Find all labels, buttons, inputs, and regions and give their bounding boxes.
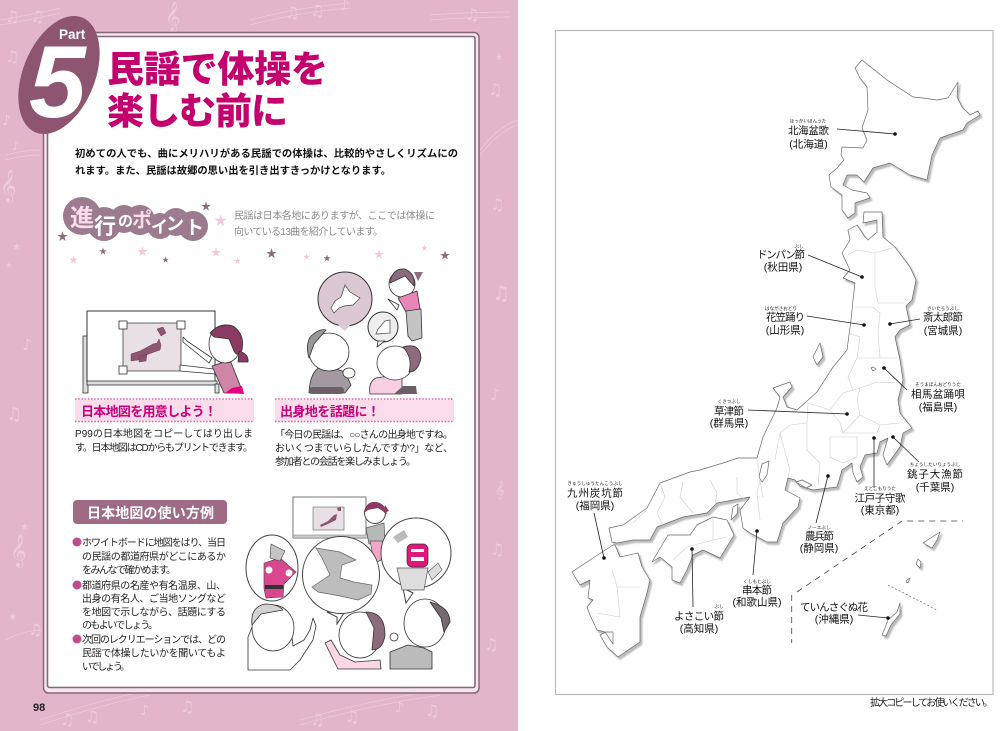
usage list <box>72 536 226 673</box>
stars row: ★ <box>137 246 148 258</box>
pink left page panel: ♫ <box>345 707 359 726</box>
pink left page panel: ♪ <box>395 700 404 716</box>
pink left page panel: ♪ <box>490 385 500 404</box>
prefecture borders <box>597 247 905 617</box>
usage list: 都道府県の名産や有名温泉、山、 <box>82 579 226 592</box>
stars row: ★ <box>162 256 169 264</box>
speech bubble: namahage <box>381 518 451 603</box>
heading: usage examples: 日本地図の使い方例 <box>87 505 214 521</box>
pink left page panel: ★ <box>495 53 503 63</box>
label: Shizuoka: ノーエぶし <box>808 525 831 530</box>
label: Chiba: 銚子大漁節 <box>907 468 963 480</box>
stars row: ★ <box>374 250 384 261</box>
stars row: ★ <box>421 244 428 252</box>
label: Chiba <box>891 435 963 494</box>
label: Fukuoka: きゅうしゅうたんこうぶし <box>567 480 623 487</box>
text: hometown topic <box>275 428 453 468</box>
stars row: ★ <box>214 213 227 228</box>
label: Fukuoka <box>567 480 623 560</box>
point description: 民謡は日本各地にありますが、ここでは体操に <box>234 209 435 222</box>
label: Okinawa <box>800 600 890 626</box>
pink left page panel: ♫ <box>30 7 44 26</box>
audience: three people <box>248 599 450 670</box>
label: Hokkaido: ほっかいぼんうた <box>790 118 827 124</box>
label: Akita: ぶし <box>794 244 804 249</box>
label: Chiba: ちょうしたいりょうぶし <box>910 462 961 468</box>
heading: hometown topic <box>275 399 454 422</box>
heading: prepare map: 日本地図を用意しよう！ <box>81 404 217 419</box>
label: Miyagi <box>888 305 963 337</box>
label: Miyagi: 斎太郎節 <box>923 310 963 324</box>
badge: progress point: ト <box>185 218 204 239</box>
label: Kochi: よさこい節 <box>674 610 724 622</box>
label: Miyagi: さいたろうぶし <box>927 305 959 312</box>
pink left page panel: 𝄞 <box>0 169 17 203</box>
label: Fukushima: そうまぼんおどりうた <box>915 381 961 388</box>
pink left page panel: ♫ <box>490 540 504 559</box>
stars row: ★ <box>201 202 211 213</box>
stars row <box>57 202 450 265</box>
title: 楽しむ前に <box>107 91 288 132</box>
panel: map frame <box>556 30 993 694</box>
usage list: の民謡の都道府県がどこにあるか <box>82 550 226 563</box>
pink left page panel: ♫ <box>60 710 74 729</box>
label: Gunma: (群馬県) <box>710 416 748 430</box>
intro text: れます。また、民謡は故郷の思い出を引き出すきっかけとなります。 <box>75 164 391 177</box>
pink left page panel: ♫ <box>28 620 42 639</box>
part badge: 5 <box>29 25 87 139</box>
pink left page panel: ♫ <box>488 80 502 99</box>
usage list: 民謡で体操したいかを聞いてもよ <box>82 646 226 660</box>
heading: prepare map <box>75 399 254 422</box>
label: Akita: ドンパン節 <box>757 248 805 261</box>
usage list: をみんなで確かめます。 <box>82 564 176 576</box>
title <box>107 49 328 132</box>
label: Kochi: (高知県) <box>680 622 718 635</box>
white framed panel <box>44 32 479 693</box>
badge: progress point: 進 <box>70 205 94 232</box>
pink left page panel: ♪ <box>12 139 20 153</box>
label: Gunma: くさつぶし <box>718 398 741 404</box>
pink left page panel: ♪ <box>140 703 149 719</box>
page number: 98 <box>33 702 45 714</box>
stars row: ★ <box>99 247 107 256</box>
label: Gunma <box>710 398 849 430</box>
label: Yamagata <box>765 305 866 336</box>
stars row: ★ <box>57 231 68 243</box>
stars row: ★ <box>323 254 331 263</box>
label: Fukushima <box>882 366 966 414</box>
usage list: を地図で示しながら、話題にする <box>82 606 226 618</box>
label: Yamagata: (山形県) <box>766 324 804 336</box>
label: Fukushima: 相馬盆踊唄 <box>911 388 966 400</box>
label: Wakayama: くしもとぶし <box>743 579 771 584</box>
part badge <box>2 4 116 146</box>
point description <box>234 209 435 238</box>
label: Akita: (秋田県) <box>764 260 802 274</box>
title: 民謡で体操を <box>107 49 328 90</box>
label: Fukushima: (福島県) <box>919 400 957 414</box>
stars row: ★ <box>440 251 450 262</box>
label: Hokkaido: (北海道) <box>789 138 828 150</box>
label: Shizuoka <box>800 474 838 554</box>
label: Yamagata: 花笠踊り <box>766 310 805 324</box>
label: Shizuoka: (静岡県) <box>800 542 838 554</box>
pink left page panel: ♫ <box>310 710 324 729</box>
label: Wakayama <box>732 529 782 608</box>
speech bubble: shachihoko <box>302 536 380 624</box>
point description: 向いている13曲を紹介しています。 <box>234 225 383 238</box>
stars row: ★ <box>211 248 221 259</box>
speech bubble: dancer <box>246 535 298 601</box>
label: Wakayama: 串本節 <box>742 584 772 596</box>
pink left page panel: ♫ <box>310 1 324 20</box>
land outlines <box>572 60 980 657</box>
usage list: ホワイトボードに地図をはり、当日 <box>82 536 226 549</box>
label: Shizuoka: 農兵節 <box>805 530 834 542</box>
heading: hometown topic: 出身地を話題に！ <box>280 404 380 419</box>
pink left page panel: ♫ <box>492 281 510 305</box>
map of Japan <box>572 60 982 660</box>
illustration: elders talking about hometown <box>307 269 423 394</box>
pink left page panel: ♫ <box>285 3 299 22</box>
usage list: のもよいでしょう。 <box>82 620 158 632</box>
label: Hokkaido: 北海盆歌 <box>788 124 830 137</box>
text: hometown topic: 参加者との会話を楽しみましょう。 <box>275 455 416 468</box>
label: Chiba: (千葉県) <box>916 480 954 494</box>
pink left page panel: 𝄞 <box>10 534 27 568</box>
pink left page panel: ♪ <box>22 335 32 354</box>
pink left page panel: ♫ <box>6 404 22 425</box>
label: Tokyo <box>854 436 906 516</box>
land shadow <box>574 62 982 660</box>
stars row: ★ <box>303 253 310 261</box>
pink left page panel: ♫ <box>180 697 194 716</box>
text: prepare map: す。日本地図はCDからもプリントできます。 <box>75 441 253 454</box>
label: Tokyo: えどこもりうた <box>864 485 896 492</box>
illustration: woman at whiteboard <box>83 311 248 394</box>
intro text: 初めての人でも、曲にメリハリがある民謡での体操は、比較的やさしくリズムにの <box>75 147 458 160</box>
label: Fukuoka: 九州炭坑節 <box>567 486 623 500</box>
label: Miyagi: (宮城県) <box>924 324 962 337</box>
pink left page panel <box>0 0 518 731</box>
badge: progress point: の <box>118 213 133 230</box>
label: Kochi: ぶし <box>714 604 724 609</box>
label: Akita <box>757 244 864 279</box>
badge: progress point: イ <box>151 218 168 237</box>
label: Tokyo: 江戸子守歌 <box>854 492 906 504</box>
pink left page panel: ♫ <box>85 707 99 726</box>
label: Gunma: 草津節 <box>714 404 744 418</box>
pink left page panel: ♫ <box>490 195 504 214</box>
label: Fukuoka: (福岡県) <box>576 499 614 512</box>
pink left page panel: ★ <box>5 261 12 270</box>
pink left page panel: ★ <box>12 242 21 253</box>
text: prepare map <box>75 427 253 454</box>
heading: usage examples <box>73 500 227 524</box>
pink left page panel: 𝄞 <box>495 480 504 500</box>
label: Okinawa: (沖縄県) <box>815 612 853 626</box>
boundary dashes <box>792 521 963 643</box>
label: Hokkaido <box>788 118 897 150</box>
label: Yamagata: はながさおどり <box>765 305 797 312</box>
pink left page panel: ★ <box>20 522 29 533</box>
usage list: 出身の有名人、ご当地ソングなど <box>82 592 226 605</box>
pink left page panel: 𝄞 <box>165 1 180 33</box>
illustration: folk song talk <box>246 497 451 670</box>
pink left page panel: ♫ <box>465 5 479 24</box>
pink left page panel: ♫ <box>5 7 19 26</box>
label: Wakayama: (和歌山県) <box>732 596 782 608</box>
pink left page panel: ♪ <box>2 113 11 129</box>
badge: progress point: ポ <box>132 209 152 232</box>
label: Kochi <box>674 547 724 635</box>
stars row: ★ <box>234 257 241 265</box>
stars row: ★ <box>266 248 277 260</box>
badge: progress point: ン <box>166 214 184 234</box>
usage list: いでしょう。 <box>82 661 130 673</box>
pink left page panel: ♫ <box>5 47 19 66</box>
part badge: Part <box>59 27 86 42</box>
usage list: 次回のレクリエーションでは、どの <box>82 633 226 646</box>
label: Tokyo: (東京都) <box>861 504 899 516</box>
label: Okinawa: ていんさぐぬ花 <box>800 600 868 614</box>
intro text <box>75 147 458 177</box>
note: enlarge copy: 拡大コピーしてお使いください。 <box>870 696 993 709</box>
text: hometown topic: おいくつまでいらしたんですか?」など、 <box>275 442 453 454</box>
text: prepare map: P99の日本地図をコピーしてはり出しま <box>75 427 253 440</box>
lakes and bays <box>759 367 876 488</box>
text: hometown topic: 「今日の民謡は、○○さんの出身地ですね。 <box>275 428 453 441</box>
pink left page panel: ♫ <box>484 635 498 654</box>
badge: progress point <box>63 197 208 241</box>
badge: progress point: 行 <box>94 214 116 239</box>
stars row: ★ <box>69 255 78 265</box>
pink left page panel: ★ <box>8 612 17 623</box>
pink left page panel: ♫ <box>425 701 439 720</box>
